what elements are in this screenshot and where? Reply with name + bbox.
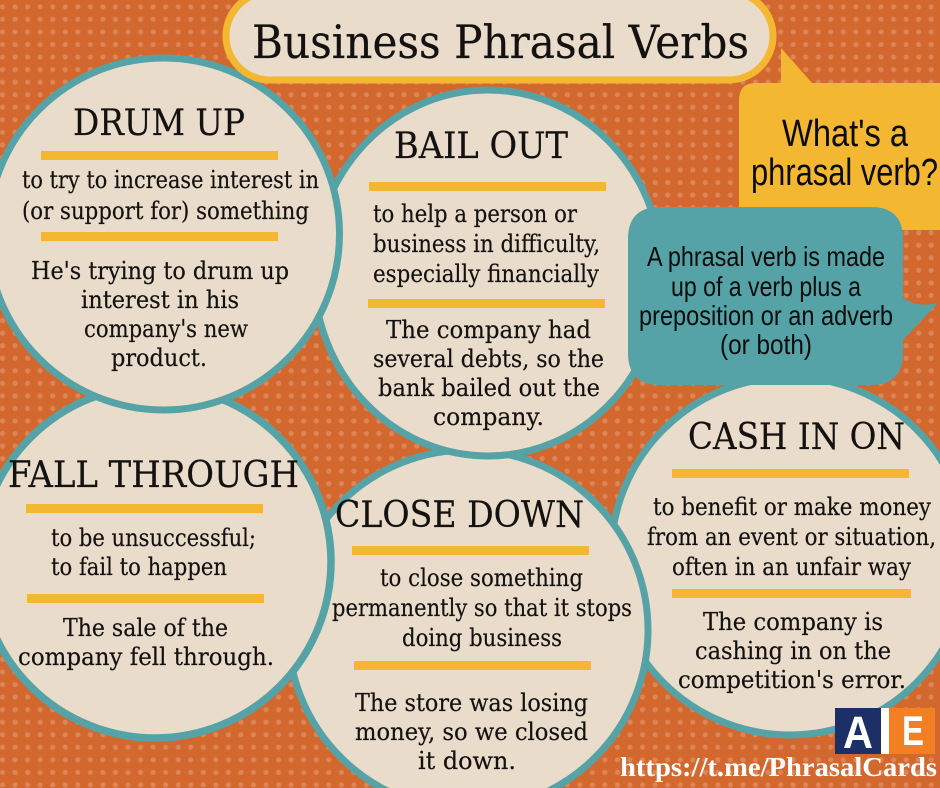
callout: phrasal verb definition: preposition or an adverb (639, 300, 893, 331)
example: bail out: company. (433, 403, 544, 431)
example: close down (355, 689, 588, 775)
panel: drum up (0, 58, 340, 410)
example: cash in on: competition's error. (678, 666, 906, 694)
definition: fall through: to fail to happen (51, 553, 227, 581)
logo: AE: E (902, 707, 924, 754)
example: cash in on: The company is (703, 608, 883, 636)
panel: close down (288, 450, 648, 788)
definition: close down: doing business (402, 624, 562, 652)
title (226, 0, 773, 80)
definition: cash in on: often in an unfair way (672, 553, 911, 581)
definition: bail out: especially financially (373, 260, 599, 288)
heading: cash in on: CASH IN ON (688, 417, 905, 458)
example: close down: money, so we closed (355, 718, 588, 746)
definition: close down (332, 564, 632, 652)
definition: drum up: to try to increase interest in (22, 166, 319, 194)
panel: fall through (0, 386, 331, 738)
definition: bail out: to help a person or (373, 200, 577, 228)
example: drum up (31, 257, 289, 372)
example: drum up: interest in his (81, 286, 239, 314)
example: fall through: company fell through. (18, 643, 274, 671)
example: drum up: product. (111, 344, 207, 372)
heading: close down: CLOSE DOWN (335, 495, 584, 536)
example: bail out: several debts, so the (373, 345, 604, 373)
example: fall through (18, 614, 274, 671)
definition: fall through (51, 524, 256, 581)
title: Business Phrasal Verbs (252, 15, 749, 69)
definition: bail out (373, 200, 600, 288)
callout: phrasal verb definition: (or both) (720, 329, 812, 360)
heading: fall through: FALL THROUGH (8, 455, 299, 496)
callout: what's a phrasal verb (739, 48, 940, 230)
heading: drum up: DRUM UP (73, 103, 245, 144)
callout: what's a phrasal verb: What's a (782, 113, 909, 155)
example: bail out: The company had (386, 316, 591, 344)
definition: close down: permanently so that it stops (332, 594, 632, 622)
panel: bail out (314, 90, 662, 456)
example: cash in on (678, 608, 906, 694)
definition: close down: to close something (380, 564, 583, 592)
example: close down: The store was losing (355, 689, 588, 717)
panel: cash in on (611, 377, 940, 735)
logo: AE: A (843, 707, 873, 758)
definition: bail out: business in difficulty, (373, 230, 600, 258)
example: bail out (373, 316, 604, 431)
example: bail out: bank bailed out the (378, 374, 600, 402)
callout: phrasal verb definition: A phrasal verb is made (647, 241, 885, 272)
logo: AE (835, 707, 935, 758)
example: drum up: company's new (84, 315, 248, 343)
definition: fall through: to be unsuccessful; (51, 524, 256, 552)
callout: phrasal verb definition: up of a verb plus a (671, 271, 861, 302)
callout: phrasal verb definition (628, 207, 938, 385)
example: cash in on: cashing in on the (695, 637, 891, 665)
definition: cash in on (647, 493, 936, 581)
source url: https://t.me/PhrasalCards (620, 752, 937, 782)
definition: drum up (22, 166, 319, 225)
example: fall through: The sale of the (63, 614, 228, 642)
heading: bail out: BAIL OUT (394, 126, 568, 167)
definition: drum up: (or support for) something (22, 197, 309, 225)
example: drum up: He's trying to drum up (31, 257, 289, 285)
example: close down: it down. (418, 747, 516, 775)
